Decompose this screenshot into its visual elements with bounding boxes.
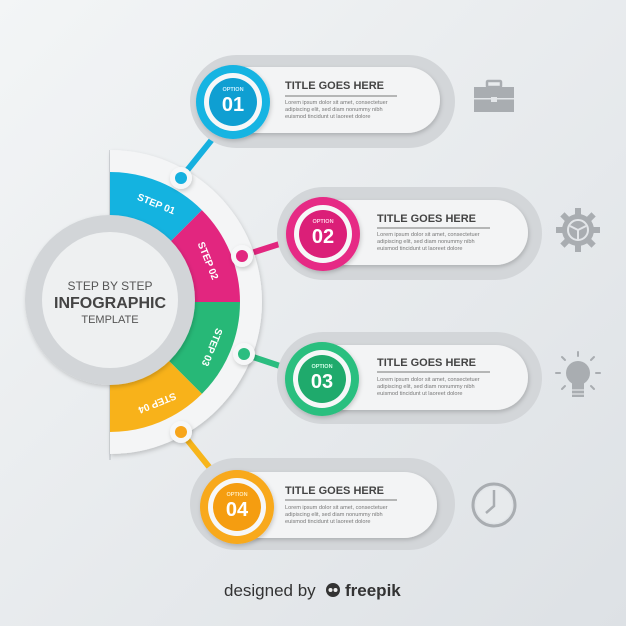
- option 03: 03: [311, 371, 333, 393]
- step labels: STEP 03: [199, 326, 224, 368]
- icon: briefcase: [474, 81, 514, 112]
- option 03: [277, 332, 542, 424]
- option 01: adipiscing elit, sed diam nonummy nibh: [285, 107, 383, 113]
- center circle title: INFOGRAPHIC: [54, 295, 166, 312]
- option 04: euismod tincidunt ut laoreet dolore: [285, 519, 371, 525]
- option 04: OPTION: [226, 492, 248, 498]
- option 01: Lorem ipsum dolor sit amet, consectetuer: [285, 100, 388, 106]
- option 01: 01: [222, 94, 244, 116]
- connector lines: [181, 132, 292, 478]
- option 01: [190, 55, 455, 148]
- option 02: TITLE GOES HERE: [377, 213, 476, 225]
- connector dots: [170, 167, 255, 443]
- step labels: STEP 02: [195, 241, 220, 282]
- option 02: OPTION: [312, 219, 334, 225]
- center circle title: STEP BY STEP: [68, 279, 152, 293]
- icon: light bulb: [556, 352, 600, 397]
- icon: gear: [556, 208, 600, 252]
- option 03: Lorem ipsum dolor sit amet, consectetuer: [377, 377, 480, 383]
- icon: clock: [473, 484, 515, 526]
- option 03: adipiscing elit, sed diam nonummy nibh: [377, 384, 475, 390]
- option 03: TITLE GOES HERE: [377, 357, 476, 369]
- step labels: STEP 04: [136, 390, 177, 415]
- option 01: TITLE GOES HERE: [285, 80, 384, 92]
- option 02: [277, 187, 542, 280]
- option 01: OPTION: [222, 87, 244, 93]
- footer credit: [224, 581, 401, 600]
- option 02: 02: [312, 226, 334, 248]
- semicircle step ring: [110, 150, 262, 454]
- option 02: Lorem ipsum dolor sit amet, consectetuer: [377, 232, 480, 238]
- option 02: adipiscing elit, sed diam nonummy nibh: [377, 239, 475, 245]
- center circle title: TEMPLATE: [81, 314, 139, 326]
- step labels: STEP 01: [135, 192, 177, 217]
- footer credit: designed by: [224, 581, 316, 600]
- option 04: adipiscing elit, sed diam nonummy nibh: [285, 512, 383, 518]
- option 01: euismod tincidunt ut laoreet dolore: [285, 114, 371, 120]
- option 03: OPTION: [311, 364, 333, 370]
- step labels: [135, 192, 224, 415]
- option 04: 04: [226, 499, 249, 521]
- option 04: Lorem ipsum dolor sit amet, consectetuer: [285, 505, 388, 511]
- center circle title: [25, 215, 195, 385]
- option 03: euismod tincidunt ut laoreet dolore: [377, 391, 463, 397]
- option 04: [190, 458, 455, 550]
- footer credit: freepik: [345, 581, 401, 600]
- option 02: euismod tincidunt ut laoreet dolore: [377, 246, 463, 252]
- option 04: TITLE GOES HERE: [285, 485, 384, 497]
